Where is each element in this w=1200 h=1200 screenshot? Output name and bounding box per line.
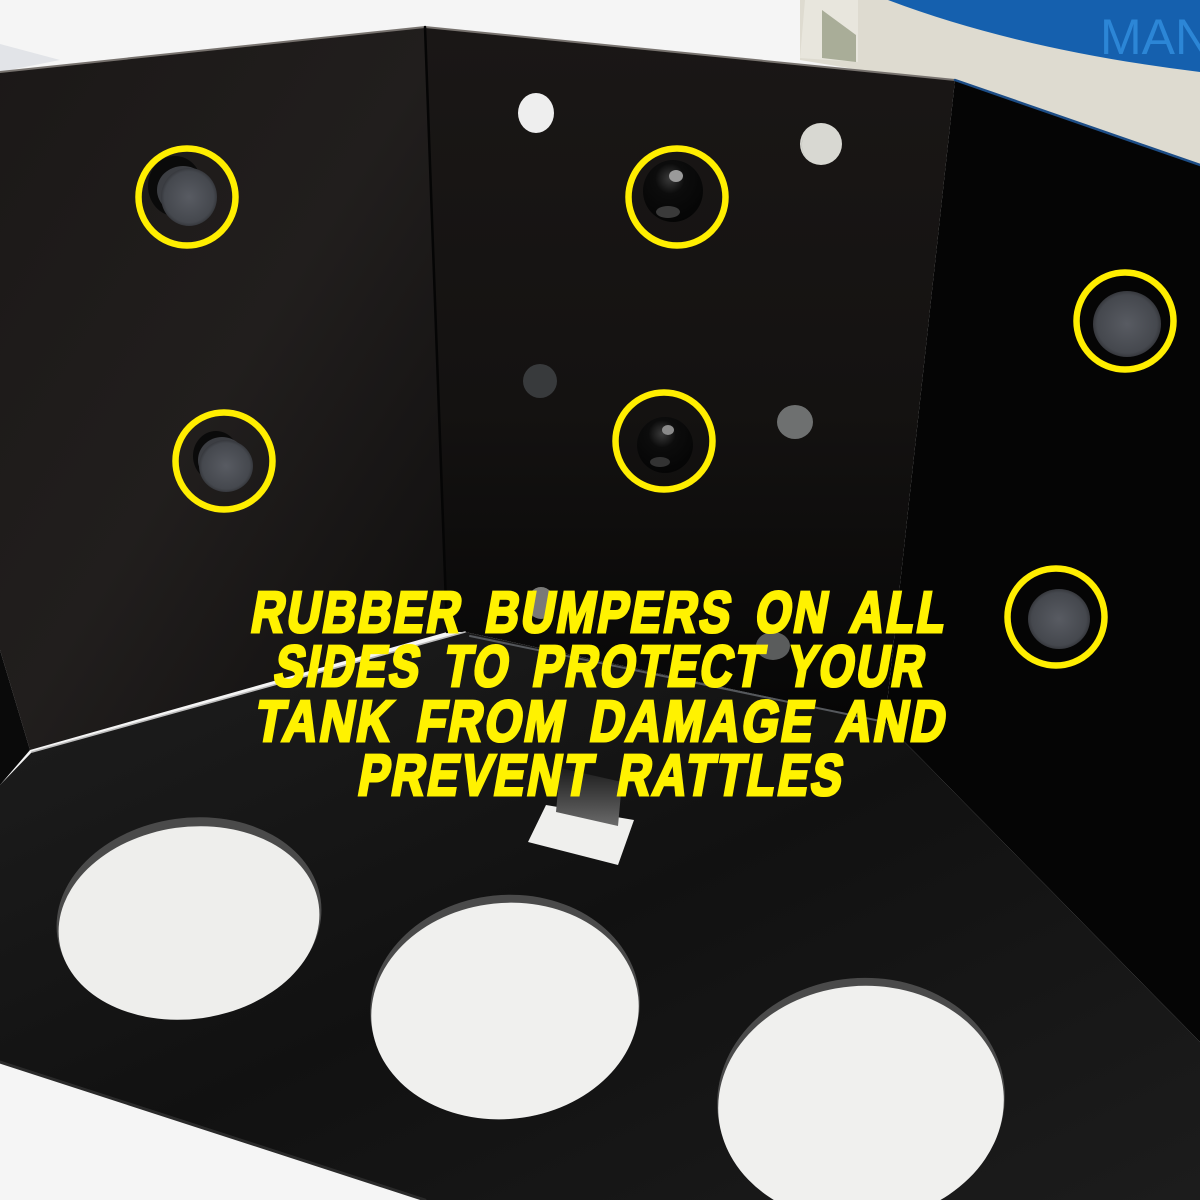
floor panel (0, 632, 1200, 1200)
headline text: PREVENT RATTLES (354, 743, 851, 808)
floor hole 1 (43, 800, 335, 1036)
floor tab slot (528, 768, 634, 865)
small grey studs (523, 364, 813, 660)
floor hole 2 (359, 882, 651, 1132)
blue tank lid (888, 0, 1200, 72)
centre panel (425, 27, 955, 722)
headline text: TANK FROM DAMAGE AND (251, 689, 954, 754)
bumper left top (138, 148, 236, 246)
headline text (247, 580, 954, 808)
bumper left lower (176, 412, 272, 510)
floor hole 3 (707, 966, 1015, 1200)
bumper centre lower (616, 392, 712, 490)
bumper right lower (1008, 568, 1104, 666)
left panel (0, 27, 447, 750)
headline text: SIDES TO PROTECT YOUR (270, 634, 933, 699)
right panel (885, 80, 1200, 1042)
open mount holes (518, 93, 842, 165)
bumper centre top (628, 148, 726, 246)
lower left wall sliver (0, 650, 30, 785)
headline text: RUBBER BUMPERS ON ALL (247, 580, 954, 645)
bumper right upper (1076, 272, 1174, 370)
